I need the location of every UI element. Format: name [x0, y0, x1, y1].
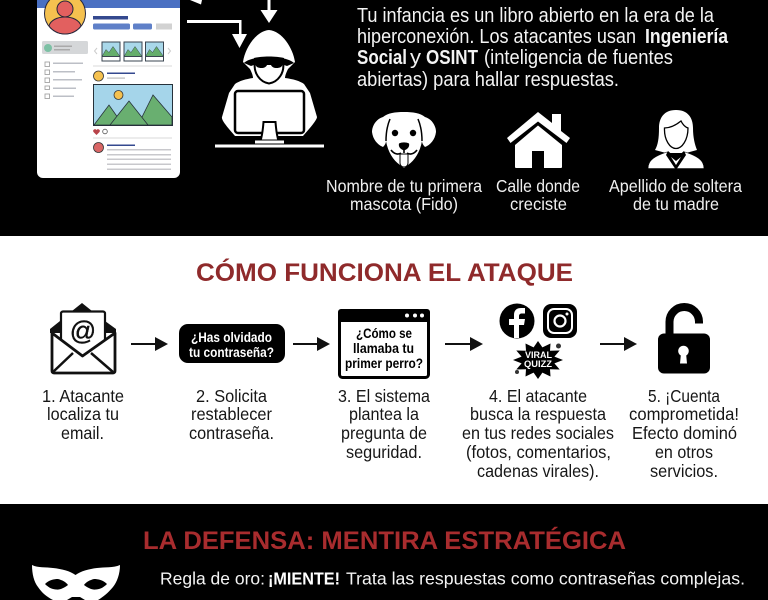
label: mascota: Nombre de tu primera: [326, 176, 482, 196]
post with landscape: [93, 71, 172, 138]
step 4 text: [462, 386, 614, 481]
icon: facebook: [500, 304, 534, 338]
icon: security question window: ¿Cómo se: [356, 325, 412, 341]
arrow: top into hacker: [260, 0, 278, 23]
heading: como funciona: CÓMO FUNCIONA EL ATAQUE: [196, 257, 573, 287]
text block: golden rule: ¡MIENTE!: [268, 568, 340, 588]
text block: intro paragraph: OSINT: [426, 46, 478, 69]
text block: golden rule: Trata las respuestas como contraseñas complejas.: [346, 568, 745, 588]
step 3 text: pregunta de: [341, 423, 427, 443]
arrow: step 1 to 2: [131, 337, 168, 351]
arrow: step 4 to 5: [600, 337, 637, 351]
step 4 text: cadenas virales).: [477, 461, 599, 481]
panel: how the attack works: [0, 236, 768, 504]
step 1 text: localiza tu: [47, 404, 119, 424]
step 1 text: 1. Atacante: [42, 386, 124, 406]
sidebar: [42, 41, 88, 98]
step 5 text: 5. ¡Cuenta: [648, 386, 720, 406]
icon: viral quiz burst: QUIZZ: [524, 359, 553, 369]
step 4 text: (fotos, comentarios,: [466, 442, 611, 462]
icon: envelope: @: [70, 316, 96, 346]
label: apellido: de tu madre: [633, 194, 719, 214]
icon: mask: [32, 565, 120, 600]
step 3 text: 3. El sistema: [338, 386, 430, 406]
text block: intro paragraph: Tu infancia es un libro abierto en la era de la: [357, 4, 715, 27]
text block: intro paragraph: [357, 4, 729, 91]
arrow: profile to hacker: [187, 20, 247, 48]
label: mascota: mascota (Fido): [350, 194, 458, 214]
step 2 text: 2. Solicita: [196, 386, 267, 406]
text block: intro paragraph: (inteligencia de fuentes: [484, 46, 673, 69]
profile bars: [93, 16, 172, 30]
step 2 text: [189, 386, 274, 443]
icon: dog: [372, 112, 436, 168]
icon: envelope: [50, 303, 116, 373]
post with text: [94, 142, 171, 170]
text block: golden rule: [160, 568, 745, 588]
step 1 text: [42, 386, 124, 443]
text block: intro paragraph: hiperconexión. Los atacantes usan: [357, 25, 636, 48]
icon: hooded hacker at computer: [215, 30, 324, 148]
step 2 text: restablecer: [191, 404, 272, 424]
icon: house: [507, 112, 570, 168]
icon: password bubble: [179, 324, 285, 363]
icon: instagram: [543, 304, 577, 338]
label: calle: creciste: [510, 194, 567, 214]
label: mascota: [326, 176, 482, 214]
text block: intro paragraph: y: [410, 46, 422, 69]
step 5 text: en otros: [655, 442, 713, 462]
step 4 text: busca la respuesta: [470, 404, 606, 424]
step 5 text: servicios.: [650, 461, 718, 481]
step 1 text: email.: [61, 423, 104, 443]
label: calle: [496, 176, 580, 214]
icon: security question window: [338, 309, 430, 378]
arrow: step 2 to 3: [293, 337, 330, 351]
step 2 text: contraseña.: [189, 423, 274, 443]
arrow: from top left fragment: [190, 0, 202, 4]
step 4 text: en tus redes sociales: [462, 423, 614, 443]
icon: password bubble: tu contraseña?: [189, 345, 274, 360]
text block: intro paragraph: Social: [357, 46, 407, 69]
step 5 text: Efecto dominó: [632, 423, 737, 443]
icon: open padlock: [658, 307, 710, 374]
label: apellido: Apellido de soltera: [609, 176, 742, 196]
label: apellido: [609, 176, 742, 214]
step 3 text: plantea la: [349, 404, 419, 424]
label: calle: Calle donde: [496, 176, 580, 196]
icon: password bubble: ¿Has olvidado: [191, 330, 272, 345]
icon: security question window: primer perro?: [345, 355, 423, 371]
step 4 text: 4. El atacante: [489, 386, 587, 406]
icon: woman: [648, 110, 704, 168]
photo thumbnails: [94, 42, 170, 61]
text block: intro paragraph: Ingeniería: [645, 25, 729, 48]
arrow: step 3 to 4: [445, 337, 483, 351]
text block: golden rule: Regla de oro:: [160, 568, 265, 588]
icon: security question window: llamaba tu: [353, 340, 414, 356]
avatar: [44, 0, 86, 34]
text block: intro paragraph: abiertas) para hallar respuestas.: [357, 68, 619, 91]
icon: viral quiz burst: VIRAL: [525, 350, 553, 360]
step 5 text: comprometida!: [629, 404, 739, 424]
icon: viral quiz burst: [513, 341, 563, 379]
panel: social profile mockup: [37, 0, 180, 178]
step 3 text: [338, 386, 430, 462]
heading: la defensa: LA DEFENSA: MENTIRA ESTRATÉGICA: [143, 526, 626, 555]
step 3 text: seguridad.: [346, 442, 422, 462]
step 5 text: [629, 386, 739, 481]
